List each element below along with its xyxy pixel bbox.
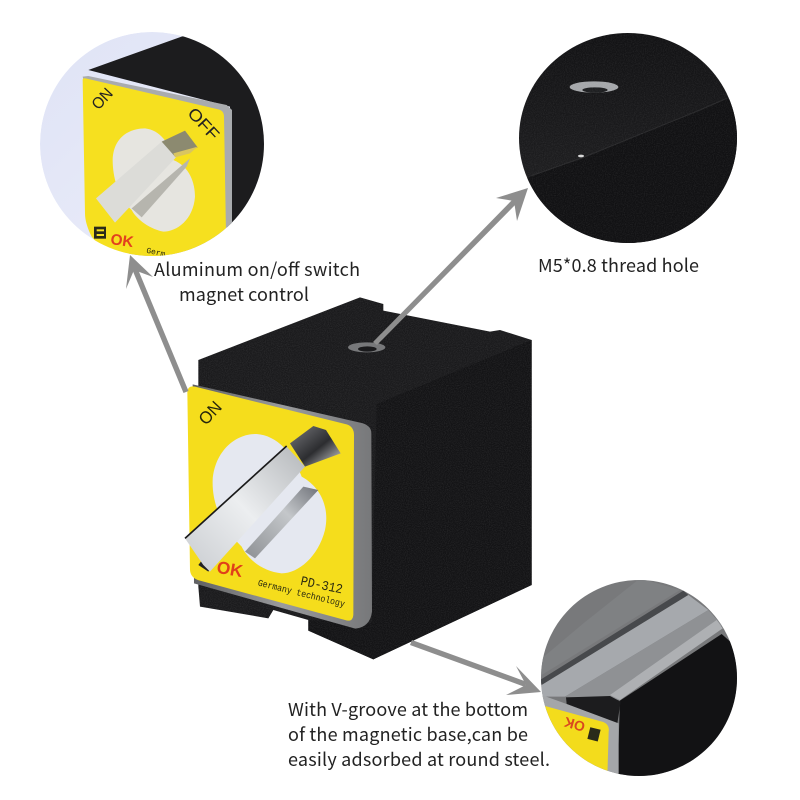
model number: PD-312 bbox=[299, 575, 344, 598]
upside-down logo bbox=[587, 727, 601, 741]
block silhouette and top face bbox=[198, 297, 532, 659]
small plate text: Germ bbox=[145, 247, 166, 260]
metal plate bbox=[193, 384, 372, 629]
upper steel surface highlight bbox=[541, 580, 647, 672]
caption: V-groove bbox=[288, 696, 550, 772]
panel: V-groove detail circle bbox=[541, 580, 737, 776]
handle top face bbox=[185, 447, 305, 572]
handle lower face bbox=[132, 158, 190, 217]
handle tip bbox=[290, 426, 341, 467]
edge highlight bbox=[531, 98, 727, 176]
white dial bbox=[213, 434, 326, 573]
icon: black body of switch detail bbox=[88, 36, 270, 233]
yellow plate bbox=[187, 386, 354, 621]
label OFF: OFF bbox=[184, 104, 223, 144]
yellow plate upside down bbox=[545, 706, 609, 771]
label ON: ON bbox=[194, 397, 226, 429]
red OK mark: OK bbox=[215, 557, 245, 581]
handle tip bbox=[162, 131, 198, 157]
handle shadow bbox=[198, 558, 212, 572]
white dial bbox=[113, 128, 195, 232]
panel: main magnetic base product bbox=[185, 290, 540, 667]
caption: switch: magnet control bbox=[179, 281, 309, 307]
caption: thread hole: M5*0.8 thread hole bbox=[538, 252, 699, 278]
handle side face bbox=[245, 487, 318, 558]
handle top face bbox=[96, 142, 177, 223]
plate edge bbox=[542, 696, 619, 774]
right face of block bbox=[308, 340, 532, 659]
small paint chip bbox=[578, 155, 584, 157]
panel: thread hole detail circle bbox=[519, 33, 737, 243]
front faces of block bbox=[528, 98, 737, 243]
plate caption: Germany technology bbox=[257, 578, 346, 610]
thread hole on top bbox=[348, 342, 385, 352]
yellow switch plate bbox=[83, 78, 226, 267]
caption: switch bbox=[154, 256, 360, 307]
grain texture bbox=[190, 290, 540, 667]
caption: switch: Aluminum on/off switch bbox=[154, 256, 360, 282]
light steel band bbox=[542, 595, 708, 697]
caption: V-groove: With V-groove at the bottom bbox=[288, 696, 528, 722]
label ON: ON bbox=[89, 85, 117, 113]
arrow: to thread hole detail bbox=[373, 188, 528, 345]
caption: V-groove: of the magnetic base,can be bbox=[288, 721, 528, 747]
grain texture bbox=[515, 30, 740, 246]
groove line bbox=[540, 591, 688, 685]
panel: switch detail circle bbox=[40, 32, 270, 267]
arrow: to V-groove detail bbox=[410, 640, 541, 695]
caption: V-groove: easily adsorbed at round steel. bbox=[288, 746, 550, 772]
brand logo bbox=[94, 226, 134, 248]
brand logo: OK bbox=[109, 231, 135, 251]
black foot wedge bbox=[566, 696, 621, 723]
icon: thread hole bbox=[570, 81, 618, 93]
middle steel band bbox=[565, 610, 722, 700]
grey plate edge bbox=[83, 76, 232, 260]
upside-down OK mark: OK bbox=[562, 714, 587, 735]
black block face bbox=[618, 634, 737, 776]
arrow: to switch detail bbox=[126, 255, 188, 393]
